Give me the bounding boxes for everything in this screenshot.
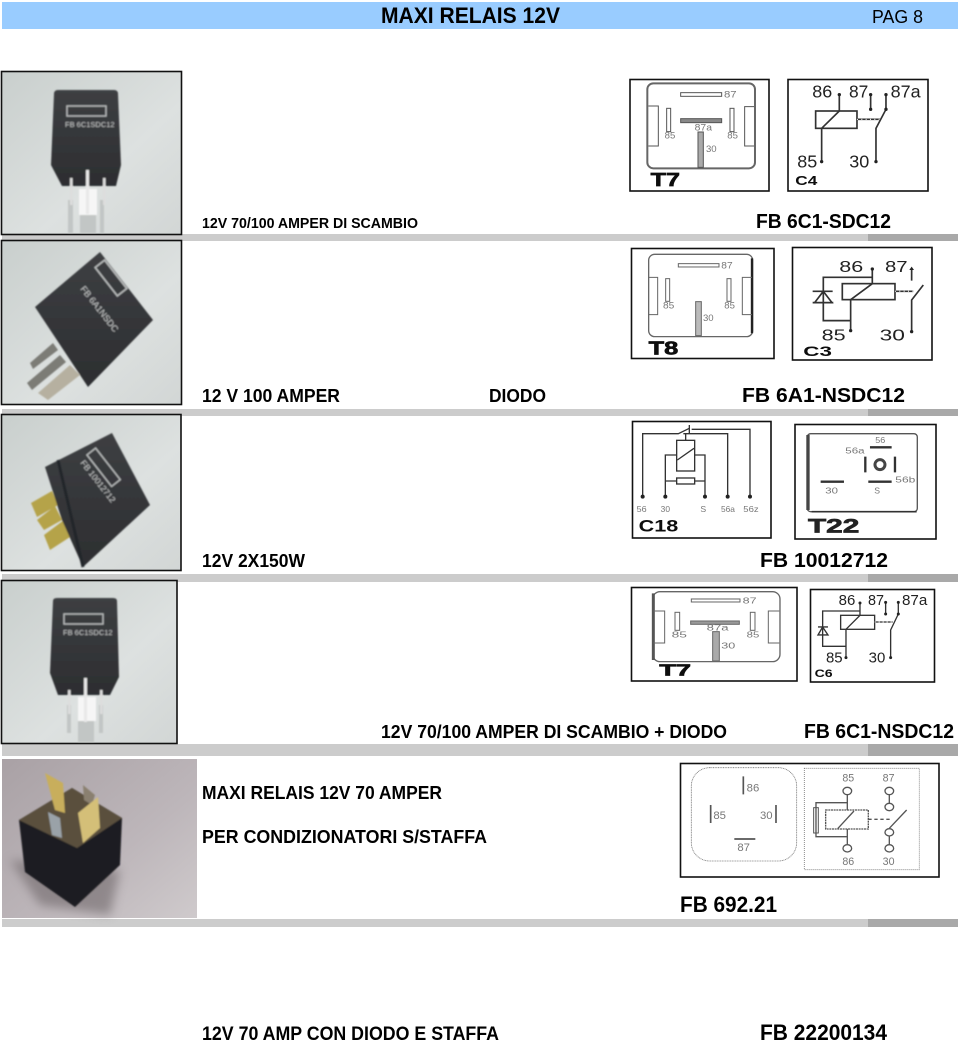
diagram: C6 circuit: C6 <box>815 668 833 680</box>
diagram: T7 pinout: T7 <box>651 169 680 190</box>
diagram: C6 circuit: 87a <box>902 593 928 609</box>
diagram: T22 pinout: 56 <box>875 435 885 445</box>
pin layout <box>691 768 797 861</box>
photo: relay FB 6C1-NSDC12: FB 6C1SDC12 <box>63 628 113 637</box>
diagram: C18 circuit: 56 <box>637 504 647 514</box>
diagram: T8 pinout: 87 <box>721 261 733 271</box>
pin layout: 30 <box>760 810 773 822</box>
diagram: C4 circuit: 86 <box>812 82 832 102</box>
diagram: C6 circuit <box>810 590 934 682</box>
diagram: T7 pinout <box>630 80 769 191</box>
diagram: C18 circuit: 56a <box>721 504 735 514</box>
photo: relay FB 6A1-NSDC12 <box>2 240 182 404</box>
diagram: C18 circuit: 30 <box>661 504 670 514</box>
diagram: T7 pinout second: 87a <box>707 623 729 633</box>
diagram: C18 circuit: S <box>700 504 706 514</box>
row divider 5 <box>2 919 958 927</box>
diagram: T7 pinout: 30 <box>706 144 717 154</box>
diagram: T8 pinout: 85 <box>663 300 674 310</box>
diagram: C4 circuit: 85 <box>797 152 817 172</box>
diagram: T8 pinout <box>632 248 774 358</box>
diagram: T22 pinout: 56b <box>895 474 916 484</box>
diagram: T7 pinout second: T7 <box>659 663 691 680</box>
text: row 5 code: FB 692.21 <box>680 892 777 917</box>
diagram: T22 pinout <box>795 424 936 539</box>
pin layout: 86 <box>747 783 759 795</box>
photo: relay FB 10012712 <box>2 414 181 570</box>
diagram: T8 pinout: T8 <box>649 337 678 358</box>
text: row 4 code: FB 6C1-NSDC12 <box>804 721 954 743</box>
row divider 4 <box>2 744 958 756</box>
diagram: T22 pinout: S <box>874 486 880 496</box>
diagram: T22 pinout: 56a <box>845 446 865 456</box>
diagram: T7 pinout: 85 <box>665 131 675 141</box>
photo: relay FB 6C1-SDC12 <box>2 72 182 234</box>
relay circuit: 86 <box>842 856 854 868</box>
diagram: C6 circuit: 86 <box>839 593 855 609</box>
relay circuit: 87 <box>883 773 895 785</box>
pin layout: 85 <box>713 810 726 822</box>
row divider 2 <box>2 409 958 416</box>
text: row 5 description line 2: PER CONDIZIONATORI S/STAFFA <box>202 827 487 847</box>
diagram: T22 pinout: 30 <box>825 486 838 496</box>
photo: relay FB 6C1-SDC12: FB 6C1SDC12 <box>65 120 115 129</box>
diagram: T7 pinout: 87 <box>724 90 737 100</box>
header bar <box>2 2 958 29</box>
diagram: T7 pinout: 85 <box>727 131 738 141</box>
row divider 1 <box>2 234 958 241</box>
relay circuit: 85 <box>842 773 854 785</box>
photo: relay FB 692.21 <box>2 759 197 918</box>
row divider 3 <box>2 574 958 582</box>
diagram: T22 pinout: T22 <box>808 516 859 537</box>
relay circuit <box>804 768 919 870</box>
diagram: T7 pinout second: 30 <box>721 641 736 651</box>
diagram: C3 circuit: 86 <box>839 259 863 276</box>
diagram: C4 circuit <box>788 80 928 191</box>
diagram: C4 circuit: C4 <box>795 173 818 188</box>
diagram: C6 circuit: 85 <box>826 651 843 667</box>
diagram: C4 circuit: 87a <box>891 82 921 102</box>
text: row 5 description line 1: MAXI RELAIS 12V 70 AMPER <box>202 783 442 803</box>
diagram: C3 circuit: 30 <box>880 328 905 345</box>
diagram: C3 circuit: 85 <box>822 328 846 345</box>
photo: relay FB 10012712: FB 10012712 <box>78 458 118 505</box>
text: row 3 description: 12V 2X150W <box>202 551 305 571</box>
text: row 2 description: 12 V 100 AMPER <box>202 386 340 406</box>
diagram: T7 pinout second: 87 <box>743 596 757 606</box>
diagram: T7 pinout second: 85 <box>672 629 687 639</box>
diagram: C4 circuit: 87 <box>849 82 868 102</box>
diagram: T7 pinout: 87a <box>695 122 713 132</box>
pin layout: 87 <box>737 842 750 854</box>
diagram: C3 circuit <box>792 248 932 360</box>
title: MAXI RELAIS 12V <box>381 3 560 28</box>
diagram: C18 circuit: 56z <box>743 504 759 514</box>
text: row 3 code: FB 10012712 <box>760 550 888 572</box>
photo: relay FB 6C1-NSDC12 <box>2 580 177 744</box>
text: row 2 diode: DIODO <box>489 386 546 406</box>
diagram: C18 circuit <box>632 422 771 538</box>
text: row 1 description: 12V 70/100 AMPER DI SCAMBIO <box>202 215 418 232</box>
text: row 1 code: FB 6C1-SDC12 <box>756 211 891 233</box>
diagram: C3 circuit: C3 <box>803 343 832 359</box>
diagram: C6 circuit: 87 <box>868 593 884 609</box>
diagram: T7 pinout second <box>632 588 797 681</box>
page number: PAG 8 <box>872 7 923 27</box>
diagram: C6 circuit: 30 <box>869 651 885 667</box>
diagram: T7 pinout second: 85 <box>747 629 760 639</box>
diagram: T8 pinout: 30 <box>703 313 714 323</box>
relay circuit: 30 <box>883 856 895 868</box>
text: row 4 description: 12V 70/100 AMPER DI SCAMBIO + DIODO <box>381 722 727 742</box>
diagram: C18 circuit: C18 <box>639 517 678 536</box>
photo: relay FB 6A1-NSDC12: FB 6A1NSDC <box>78 284 121 334</box>
diagram: T8 pinout: 85 <box>724 300 735 310</box>
diagram: C4 circuit: 30 <box>849 152 869 172</box>
text: row 2 code: FB 6A1-NSDC12 <box>742 385 905 407</box>
diagram: C3 circuit: 87 <box>885 259 908 276</box>
diagram: FB 692.21 pinout and circuit <box>680 764 939 877</box>
